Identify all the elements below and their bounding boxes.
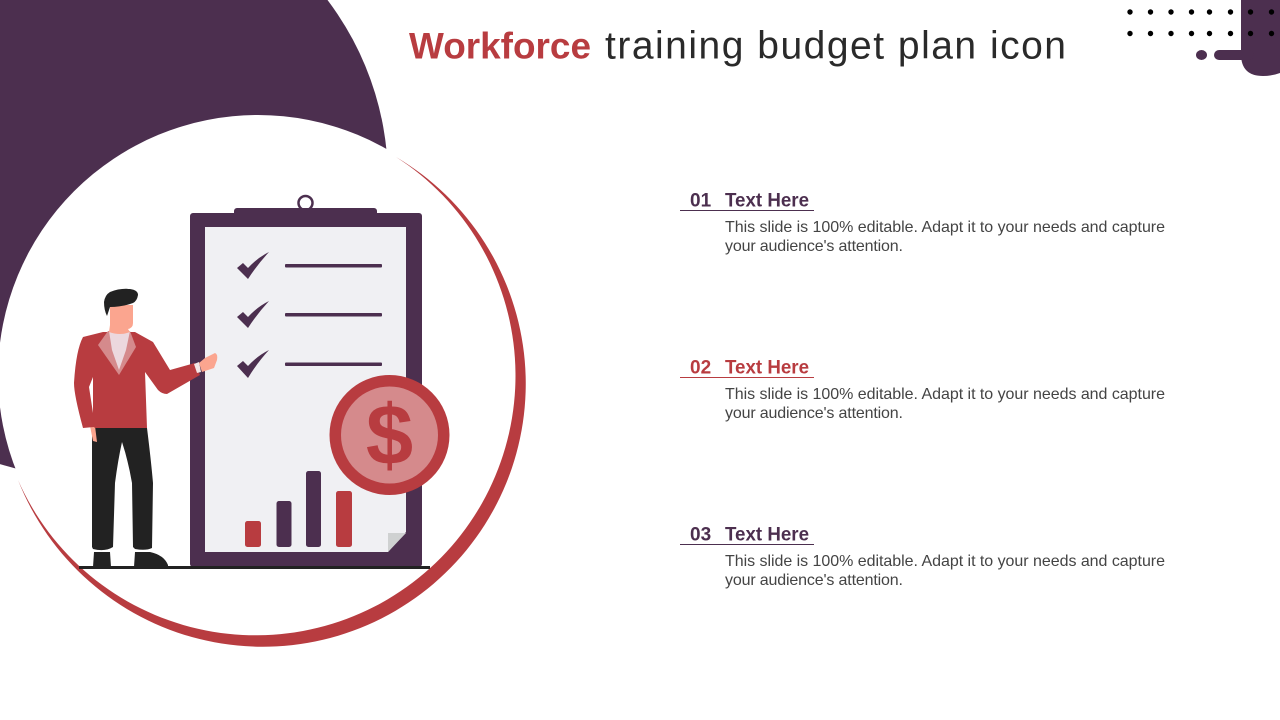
item 3 body: your audience's attention. [725, 572, 903, 589]
clipboard [190, 196, 422, 567]
check row 1 [237, 252, 382, 279]
item 2 heading: Text Here [725, 358, 809, 378]
item 2 heading: 02 [690, 358, 711, 378]
item 3 heading: 03 [690, 524, 711, 546]
item 3 heading: Text Here [725, 524, 809, 546]
checklist [237, 252, 382, 378]
background plum circle [0, 0, 388, 478]
item 1 body: This slide is 100% editable. Adapt it to your needs and capture [725, 219, 1165, 236]
lapels [98, 331, 136, 375]
hair [104, 289, 138, 316]
clipboard ring [298, 196, 312, 210]
item 1 body: your audience's attention. [725, 238, 903, 255]
dollar coin icon [330, 375, 450, 495]
item 3 body: This slide is 100% editable. Adapt it to your needs and capture [725, 553, 1165, 570]
check row 2 [237, 301, 382, 328]
person [74, 289, 217, 567]
white circle [0, 115, 518, 635]
item 3 rule [680, 544, 814, 545]
jacket [74, 332, 200, 428]
item 2 [680, 358, 1165, 422]
paper fold [388, 533, 406, 552]
item 3 [680, 524, 1165, 589]
pointing hand [199, 353, 217, 372]
left hand [90, 426, 97, 442]
item 2 rule [680, 377, 814, 378]
item 1 heading: 01 [690, 190, 712, 212]
bar chart [245, 471, 352, 547]
legs [92, 428, 153, 550]
shoes [93, 552, 168, 567]
shirt [109, 331, 130, 370]
red crescent ring [18, 157, 526, 647]
cuff [194, 362, 201, 373]
title remainder: training budget plan icon [605, 24, 1066, 68]
decoration: top right dots and pill [1127, 0, 1280, 76]
clipboard clip [234, 208, 377, 220]
item 1 [680, 190, 1165, 255]
item 2 body: your audience's attention. [725, 405, 903, 422]
item 2 body: This slide is 100% editable. Adapt it to your needs and capture [725, 386, 1165, 403]
ground line [79, 566, 430, 569]
clipboard board [190, 213, 422, 567]
item 1 heading: Text Here [725, 190, 809, 212]
paper [205, 227, 406, 552]
item 1 rule [680, 210, 814, 211]
dollar coin icon: $ [366, 388, 413, 483]
title: Workforce [409, 26, 591, 66]
check row 3 [237, 350, 382, 378]
neck and face [109, 305, 133, 334]
